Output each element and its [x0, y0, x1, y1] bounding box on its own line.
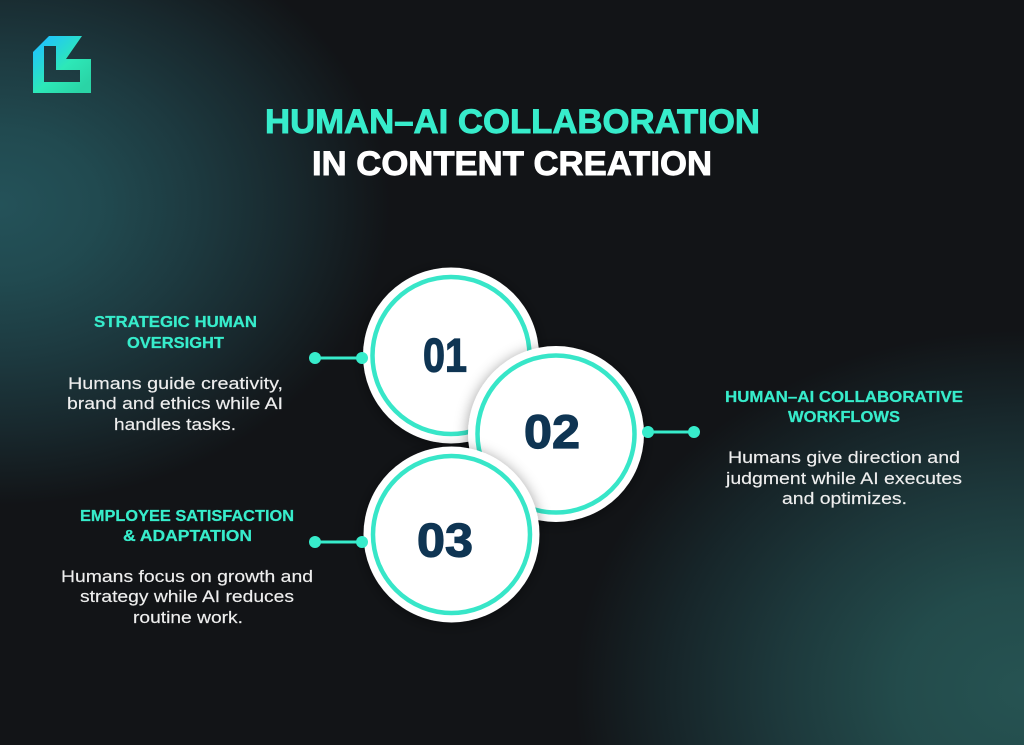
- panel: strategic human oversight: OVERSIGHT: [127, 335, 225, 352]
- panel: strategic human oversight: Humans guide creativity,: [68, 375, 283, 393]
- connector 01: [309, 352, 368, 364]
- circle 02: 02: [524, 405, 580, 458]
- connector 03: [309, 536, 368, 548]
- panel: collaborative workflows: WORKFLOWS: [788, 409, 900, 426]
- title: [265, 103, 760, 183]
- title: IN CONTENT CREATION: [312, 145, 712, 183]
- panel: strategic human oversight: brand and ethics while AI: [67, 395, 283, 413]
- connector 02: [642, 426, 700, 438]
- panel: strategic human oversight: STRATEGIC HUMAN: [94, 314, 257, 331]
- panel: collaborative workflows: judgment while AI executes: [725, 470, 962, 488]
- panel: collaborative workflows: and optimizes.: [782, 490, 907, 508]
- panel: employee satisfaction: & ADAPTATION: [123, 528, 252, 545]
- icon: logo: [33, 36, 91, 93]
- circle 01: 01: [423, 328, 467, 382]
- title: HUMAN–AI COLLABORATION: [265, 103, 760, 141]
- panel: strategic human oversight: [67, 314, 283, 434]
- panel: employee satisfaction: routine work.: [133, 609, 243, 627]
- panel: employee satisfaction: Humans focus on growth and: [61, 568, 313, 586]
- panel: collaborative workflows: Humans give direction and: [728, 449, 960, 467]
- panel: collaborative workflows: [725, 389, 963, 508]
- circle 01: [363, 268, 539, 444]
- panel: employee satisfaction: [61, 508, 313, 627]
- circle 03: 03: [417, 514, 473, 566]
- panel: employee satisfaction: strategy while AI reduces: [80, 588, 294, 606]
- panel: collaborative workflows: HUMAN–AI COLLABORATIVE: [725, 389, 963, 406]
- circle 03: [364, 446, 540, 622]
- panel: strategic human oversight: handles tasks.: [114, 416, 236, 434]
- circle 02: [468, 346, 644, 522]
- panel: employee satisfaction: EMPLOYEE SATISFACTION: [80, 508, 294, 525]
